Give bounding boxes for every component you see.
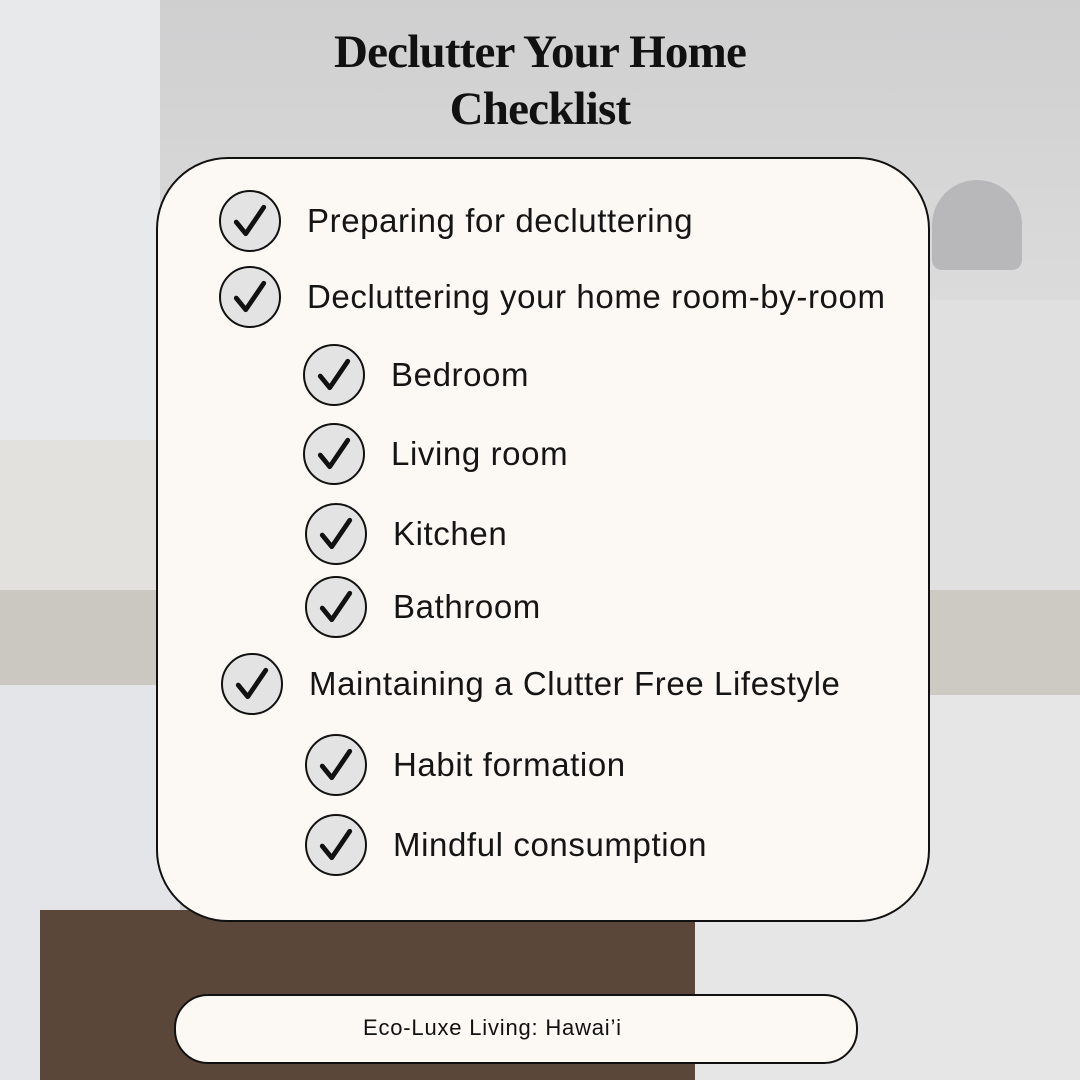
panel: checklist card <box>156 157 930 922</box>
title: Declutter Your Home <box>334 26 746 78</box>
footer text: Eco-Luxe Living: Hawai’i <box>363 1015 622 1040</box>
item: Living room <box>303 423 568 485</box>
item: Bathroom: Bathroom <box>393 588 541 625</box>
item: Kitchen <box>305 503 507 565</box>
item: Decluttering room-by-room: Decluttering your home room-by-room <box>307 278 886 315</box>
footer pill <box>174 994 858 1064</box>
item: Habit formation: Habit formation <box>393 746 626 783</box>
item: Mindful consumption: Mindful consumption <box>393 826 707 863</box>
title <box>334 26 746 135</box>
item: Mindful consumption <box>305 814 707 876</box>
item: Habit formation <box>305 734 626 796</box>
item: Bathroom <box>305 576 541 638</box>
item: Living room: Living room <box>391 435 568 472</box>
item: Maintaining <box>221 653 841 715</box>
item: Preparing: Preparing for decluttering <box>307 202 693 239</box>
item: Bedroom <box>303 344 529 406</box>
item: Maintaining: Maintaining a Clutter Free Lifestyle <box>309 665 841 702</box>
item: Bedroom: Bedroom <box>391 356 529 393</box>
title: Checklist <box>450 83 630 135</box>
item: Kitchen: Kitchen <box>393 515 507 552</box>
item: Decluttering room-by-room <box>219 266 886 328</box>
item: Preparing <box>219 190 693 252</box>
